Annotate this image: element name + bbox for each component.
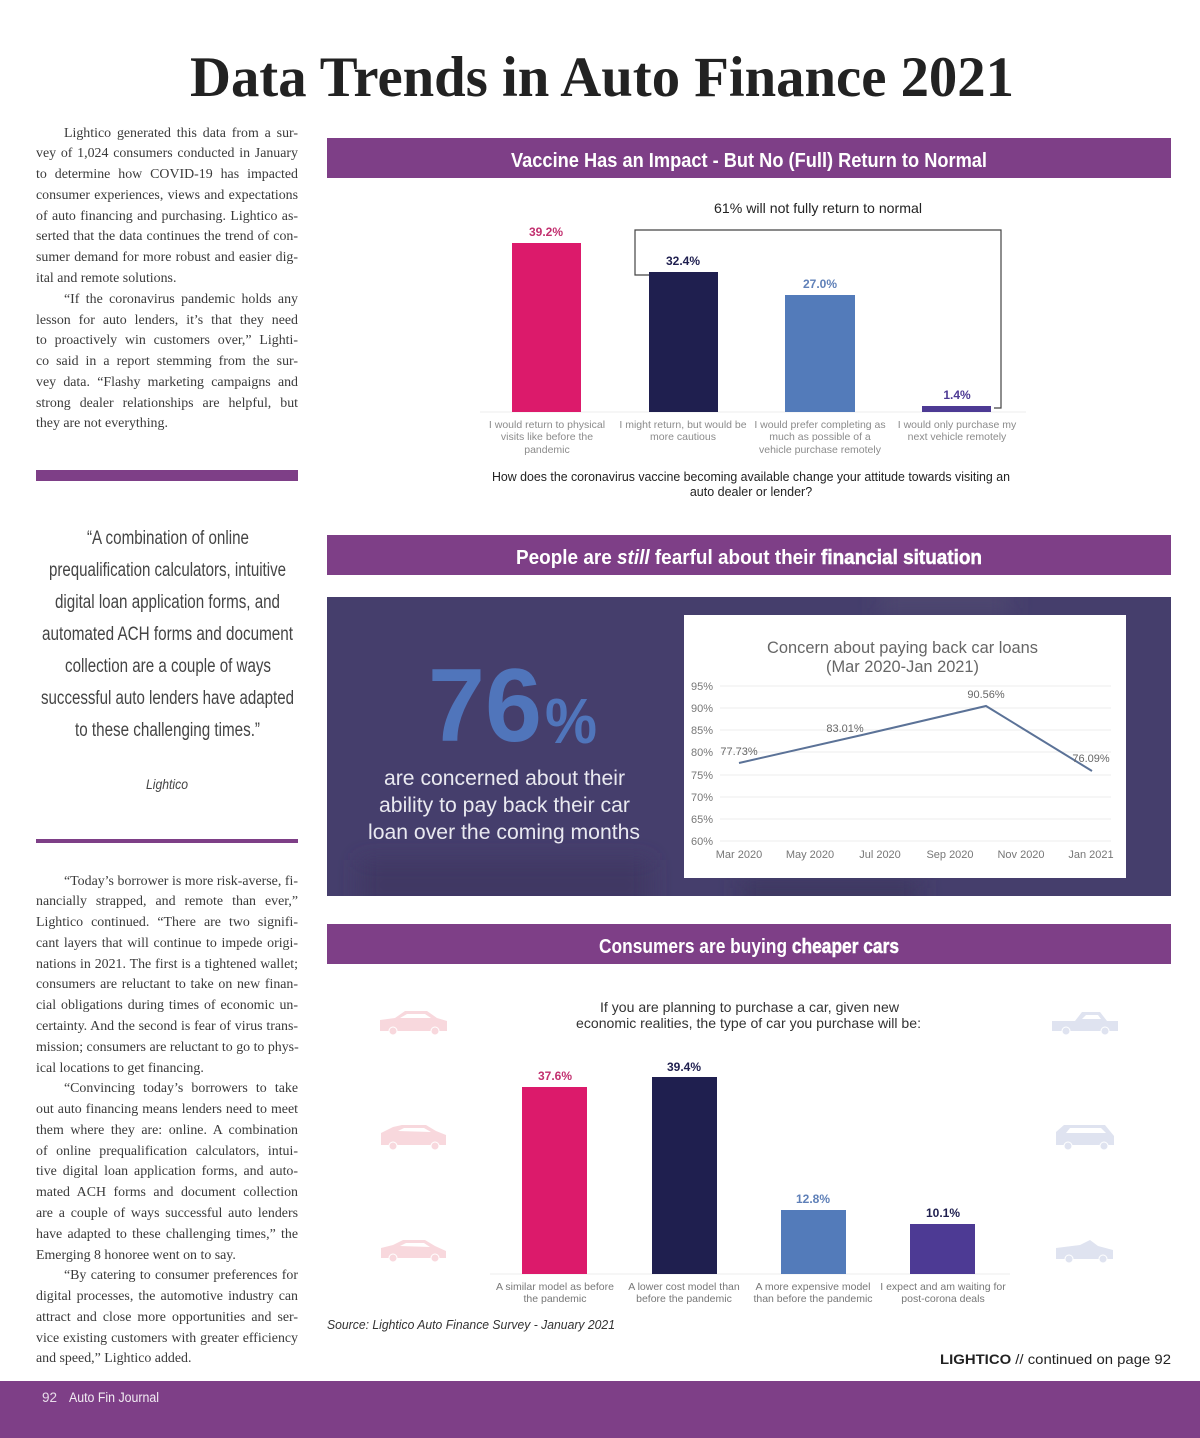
pull quote: to these challenging times.”	[75, 720, 260, 741]
category labels: I would return to physical	[489, 419, 605, 431]
survey question: auto dealer or lender?	[690, 485, 812, 499]
panel statement: loan over the coming months	[368, 820, 640, 844]
text block: main article: them where they are: online. A combination	[36, 1123, 298, 1138]
line chart: concern about car loans	[684, 615, 1126, 878]
category labels: I might return, but would be	[619, 419, 747, 431]
text block: intro: vey data. “Flashy marketing campaigns and	[36, 375, 298, 390]
icons: faint cars right	[1052, 1012, 1118, 1262]
category labels: I would prefer completing as	[754, 419, 886, 431]
text block: main article: cant layers that will continue to impede origi-	[36, 936, 298, 951]
panel: 76 percent concerned	[327, 597, 1171, 896]
text block: intro: they are not everything.	[36, 416, 168, 431]
text block: main article: “By catering to consumer preferences for	[64, 1268, 298, 1283]
line chart title	[767, 639, 1038, 676]
text block: intro: ital and remote solutions.	[36, 271, 176, 286]
y axis labels: 70%	[691, 792, 713, 804]
text block: main article: vice existing customers with greater efficiency	[36, 1331, 298, 1346]
value labels: 27.0%	[803, 277, 837, 291]
x axis labels: Jan 2021	[1068, 849, 1114, 861]
panel statement: ability to pay back their car	[379, 793, 630, 817]
text block: main article	[36, 874, 299, 1366]
text block: intro: consumer experiences, views and expectations	[36, 188, 298, 203]
text block: main article: attract and close more opportunities and ser-	[36, 1310, 298, 1325]
panel: 76 percent concerned: %	[545, 685, 597, 757]
text block: intro	[36, 126, 298, 431]
trend line	[739, 706, 1092, 771]
bar chart: type of car	[490, 999, 1010, 1305]
value labels: 37.6%	[538, 1069, 572, 1083]
category labels: before the pandemic	[636, 1293, 732, 1305]
category labels: A more expensive model	[756, 1281, 870, 1293]
big number: 76	[428, 648, 542, 764]
data labels: 77.73%	[720, 746, 758, 758]
survey question: How does the coronavirus vaccine becoming available change your attitude towards visiting an	[492, 470, 1010, 484]
line chart title: Concern about paying back car loans	[767, 639, 1038, 657]
pull quote: Lightico	[146, 776, 188, 792]
bars	[512, 243, 991, 412]
bar chart: vaccine attitude	[480, 200, 1026, 499]
value labels: 32.4%	[666, 254, 700, 268]
text block: main article: are a couple of ways successful auto lenders	[36, 1206, 298, 1221]
y axis labels: 80%	[691, 747, 713, 759]
icons: faint cars left	[380, 1011, 447, 1262]
text block: main article: digital processes, the automotive industry can	[36, 1289, 298, 1304]
y axis labels: 95%	[691, 681, 713, 693]
text block: main article: Emerging 8 honoree went on to say.	[36, 1248, 236, 1263]
survey question	[492, 470, 1010, 499]
text block: intro: strong dealer relationships are helpful, but	[36, 396, 298, 411]
title: Data Trends in Auto Finance 2021	[190, 46, 1014, 109]
value labels	[538, 1060, 960, 1220]
x axis labels: May 2020	[786, 849, 834, 861]
text block: main article: certainty. And the second is fear of virus trans-	[36, 1019, 298, 1034]
text block: main article: tive digital loan application forms, and auto-	[36, 1164, 298, 1179]
footer band	[0, 1381, 1200, 1438]
value labels	[529, 225, 971, 402]
panel statement: are concerned about their	[384, 766, 625, 790]
text block: intro: sumer demand for more robust and easier dig-	[36, 250, 298, 265]
banner: vaccine impact	[327, 138, 1171, 178]
text block: main article: have adapted to these challenging times,” the	[36, 1227, 298, 1242]
text block: main article: cial obligations during times of economic un-	[36, 998, 298, 1013]
bars	[522, 1077, 975, 1274]
y axis labels: 60%	[691, 836, 713, 848]
footer band: Auto Fin Journal	[69, 1390, 159, 1405]
text block: main article: of online prequalification calculators, intui-	[36, 1144, 298, 1159]
x axis labels: Mar 2020	[716, 849, 762, 861]
category labels: vehicle purchase remotely	[759, 444, 882, 456]
text block: main article: nations in 2021. The first is a tightened wallet;	[36, 957, 298, 972]
y axis labels: 75%	[691, 770, 713, 782]
category labels: next vehicle remotely	[908, 431, 1007, 443]
data labels: 76.09%	[1072, 753, 1110, 765]
source note: Source: Lightico Auto Finance Survey - January 2021	[327, 1317, 615, 1332]
banner: financial situation	[327, 535, 1171, 575]
value labels: 39.4%	[667, 1060, 701, 1074]
banner: vaccine impact: Vaccine Has an Impact - But No (Full) Return to Normal	[511, 150, 987, 172]
text block: main article: ical locations to get financing.	[36, 1061, 204, 1076]
category labels: the pandemic	[523, 1293, 587, 1305]
text block: main article: consumers are reluctant to take on new finan-	[36, 977, 298, 992]
category labels: visits like before the	[501, 431, 593, 443]
category labels: much as possible of a	[769, 431, 871, 443]
text block: intro: to determine how COVID-19 has impacted	[36, 167, 298, 182]
text block: main article: and speed,” Lightico added.	[36, 1351, 191, 1366]
divider bar: below quote	[36, 839, 298, 843]
banner: cheaper cars	[327, 924, 1171, 964]
chart question: If you are planning to purchase a car, given new	[600, 999, 900, 1015]
text block: main article: Lightico continued. “There are two signifi-	[36, 915, 298, 930]
category labels: post-corona deals	[901, 1293, 985, 1305]
y axis labels	[691, 681, 713, 848]
text block: intro: lesson for auto lenders, it’s that they need	[36, 313, 298, 328]
value labels: 10.1%	[926, 1206, 960, 1220]
chart heading: 61% will not fully return to normal	[714, 200, 922, 216]
text block: main article: “Today’s borrower is more risk-averse, fi-	[64, 874, 298, 888]
text block: intro: vey of 1,024 consumers conducted in January	[36, 146, 298, 161]
category labels	[489, 419, 1017, 456]
banner: cheaper cars: Consumers are buying cheaper cars	[599, 936, 899, 958]
divider bar: above quote	[36, 470, 298, 481]
value labels: 1.4%	[943, 388, 971, 402]
banner: financial situation: People are still fearful about their financial situation	[516, 547, 982, 569]
category labels: than before the pandemic	[753, 1293, 873, 1305]
category labels: A lower cost model than	[628, 1281, 740, 1293]
y axis labels: 65%	[691, 814, 713, 826]
x axis labels: Jul 2020	[859, 849, 901, 861]
line chart title: (Mar 2020-Jan 2021)	[826, 658, 979, 676]
value labels: 39.2%	[529, 225, 563, 239]
pull quote	[41, 528, 294, 792]
text block: intro: of auto financing and purchasing. Lightico as-	[36, 209, 298, 224]
category labels	[496, 1281, 1006, 1305]
data labels: 90.56%	[967, 689, 1005, 701]
x axis labels	[716, 849, 1114, 861]
text block: main article: out auto financing means lenders need to meet	[36, 1102, 298, 1117]
category labels: I expect and am waiting for	[880, 1281, 1006, 1293]
text block: main article: “Convincing today’s borrowers to take	[64, 1081, 298, 1096]
pull quote: “A combination of online	[87, 528, 249, 549]
text block: main article: mated ACH forms and document collection	[36, 1185, 298, 1200]
category labels: I would only purchase my	[898, 419, 1017, 431]
value labels: 12.8%	[796, 1192, 830, 1206]
text block: intro: to proactively win customers over,” Lighti-	[36, 333, 298, 348]
continuation note: LIGHTICO // continued on page 92	[940, 1351, 1171, 1367]
category labels: pandemic	[524, 444, 570, 456]
x axis labels: Sep 2020	[926, 849, 974, 861]
y axis labels: 85%	[691, 725, 713, 737]
chart question	[576, 999, 921, 1031]
x axis labels: Nov 2020	[997, 849, 1045, 861]
text block: intro: co said in a report stemming from the sur-	[36, 354, 298, 369]
y axis labels: 90%	[691, 703, 713, 715]
category labels: more cautious	[650, 431, 716, 443]
text block: main article: mission; consumers are reluctant to go to phys-	[36, 1040, 299, 1055]
bracket	[635, 230, 1001, 408]
panel statement	[368, 766, 640, 844]
text block: intro: serted that the data continues the trend of con-	[36, 229, 298, 244]
chart question: economic realities, the type of car you purchase will be:	[576, 1015, 921, 1031]
footer band: 92	[42, 1390, 57, 1405]
text block: main article: nancially strapped, and remote than ever,”	[36, 894, 298, 909]
text block: intro: Lightico generated this data from a sur-	[64, 126, 298, 140]
data labels	[720, 689, 1110, 765]
text block: intro: “If the coronavirus pandemic holds any	[64, 292, 298, 307]
data labels: 83.01%	[826, 723, 864, 735]
category labels: A similar model as before	[496, 1281, 614, 1293]
